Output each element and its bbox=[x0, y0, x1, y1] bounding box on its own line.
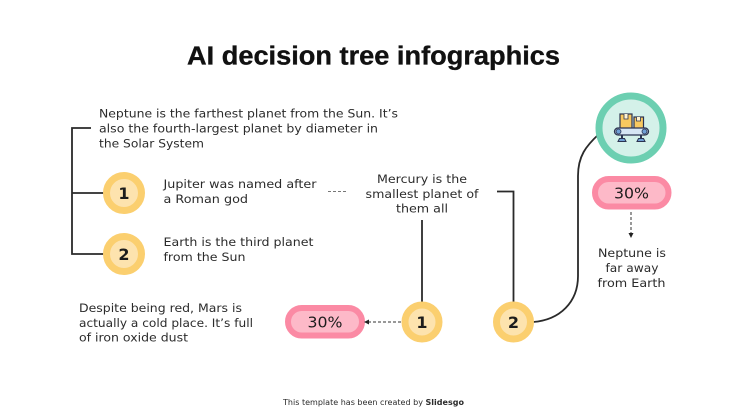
text: Mercury: Mercury is the bbox=[377, 172, 467, 186]
text: Neptune far away: from Earth bbox=[598, 276, 666, 290]
text: Mars bbox=[79, 301, 253, 344]
text: Earth bbox=[164, 235, 314, 264]
connector: Mercury to 1 bbox=[421, 220, 423, 303]
dashed arrow down bbox=[628, 212, 634, 238]
text: Neptune farthest planet: Neptune is the farthest planet from the Sun. It’s bbox=[99, 106, 398, 120]
left bracket connector bbox=[72, 128, 104, 254]
badge: left 1: 1 bbox=[118, 184, 130, 203]
footer credit: This template has been created by Slidesgo bbox=[282, 398, 464, 407]
text: Mars: of iron oxide dust bbox=[79, 330, 189, 344]
text: Earth: from the Sun bbox=[164, 250, 246, 264]
badge: bottom 2: 2 bbox=[508, 313, 519, 332]
pill: right 30%: 30% bbox=[614, 184, 649, 202]
text: Earth: Earth is the third planet bbox=[164, 235, 314, 249]
badge: left 1 bbox=[106, 176, 142, 210]
pill: right 30% bbox=[595, 179, 668, 206]
badge: left 2: 2 bbox=[118, 245, 130, 264]
text: Mercury: smallest planet of bbox=[366, 187, 480, 201]
badge: bottom 2 bbox=[496, 305, 530, 339]
text: Mars: actually a cold place. It’s full bbox=[79, 316, 253, 330]
dashed arrow to pill bbox=[364, 320, 403, 324]
text: Neptune farthest planet bbox=[99, 106, 398, 150]
badge: bottom 1: 1 bbox=[416, 313, 428, 332]
title: AI decision tree infographics bbox=[187, 42, 560, 70]
badge: bottom 1 bbox=[405, 305, 439, 339]
text: Neptune far away: Neptune is bbox=[598, 246, 666, 260]
pill: bottom 30% bbox=[288, 308, 362, 336]
dashed connector bbox=[328, 190, 348, 192]
text: Neptune farthest planet: also the fourth-largest planet by diameter in bbox=[99, 122, 378, 136]
curved connector: 2 to icon bbox=[533, 134, 599, 322]
icon: conveyor belt in teal circle bbox=[599, 96, 663, 160]
text: Jupiter: a Roman god bbox=[164, 192, 248, 206]
text: Mars: Despite being red, Mars is bbox=[79, 301, 242, 315]
badge: left 2 bbox=[106, 236, 142, 272]
text: Mercury: them all bbox=[396, 202, 448, 216]
text: Neptune far away: far away bbox=[606, 261, 659, 275]
pill: bottom 30%: 30% bbox=[308, 314, 342, 332]
text: Mercury bbox=[366, 172, 480, 216]
text: Neptune far away bbox=[598, 246, 666, 290]
connector: Mercury to 2 bbox=[497, 192, 514, 303]
text: Jupiter bbox=[162, 177, 317, 206]
text: Jupiter: Jupiter was named after bbox=[162, 177, 317, 191]
text: Neptune farthest planet: the Solar System bbox=[99, 136, 204, 150]
